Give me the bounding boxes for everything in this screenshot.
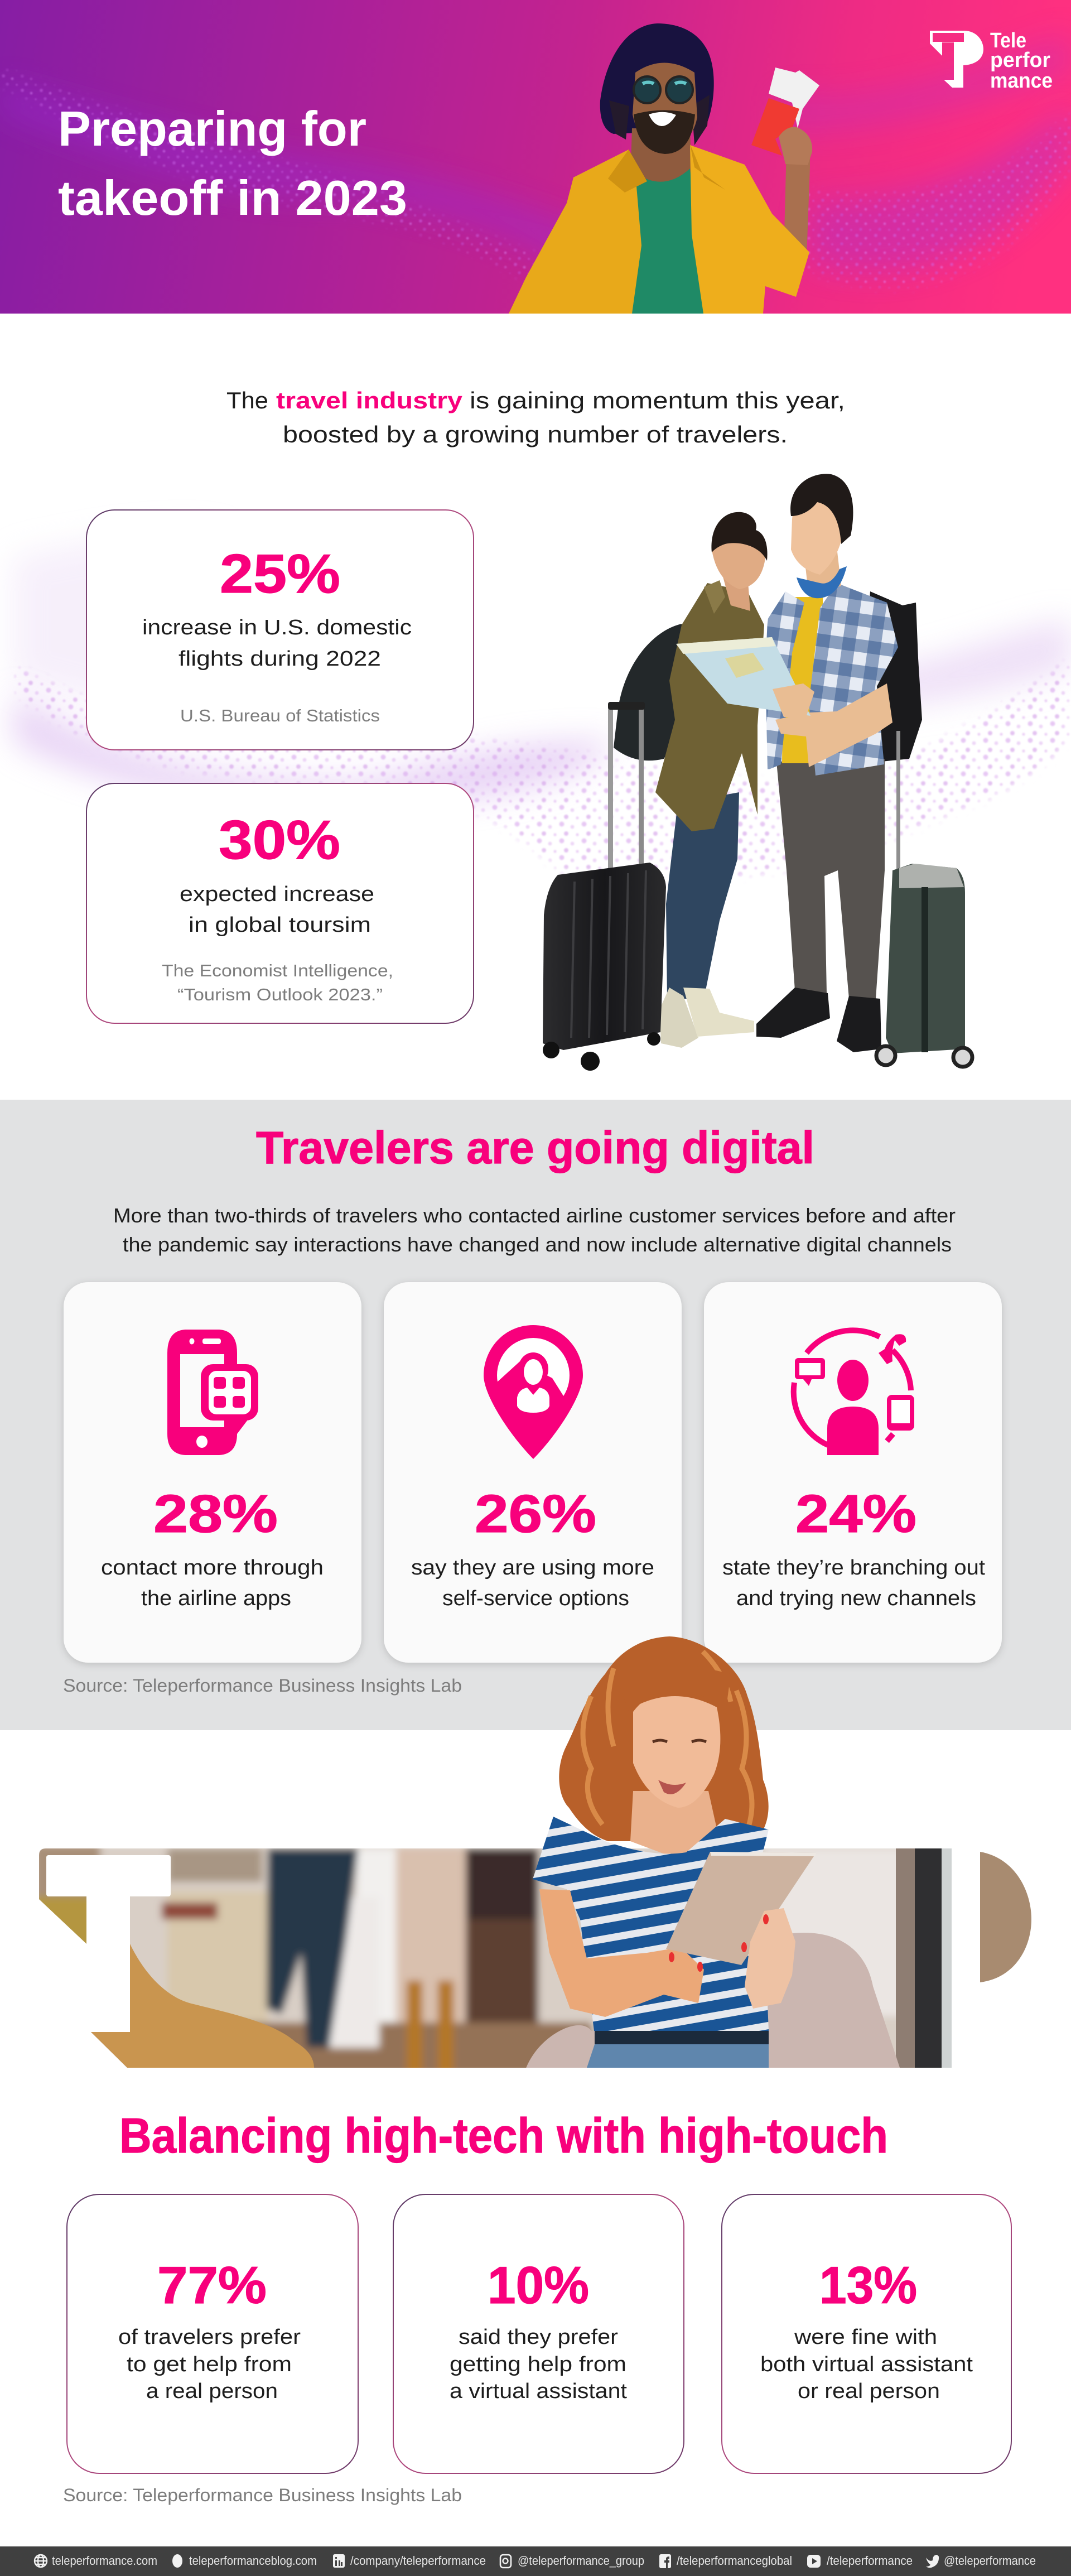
card: 24% new channels: and trying new channels xyxy=(736,1587,976,1610)
paragraph xyxy=(113,1204,956,1256)
intro statement xyxy=(226,387,845,447)
card: 13% xyxy=(722,2194,1011,2473)
man's hand on map xyxy=(773,683,814,717)
woman's backpack xyxy=(614,624,685,760)
stat card: 25%: increase in U.S. domestic xyxy=(142,616,412,639)
card: 24% new channels xyxy=(704,1282,1002,1663)
Teleperformance logo xyxy=(930,29,1053,93)
stat card: 30%: expected increase xyxy=(180,883,374,906)
P bowl wood segment xyxy=(980,1852,1031,1982)
banner background xyxy=(0,0,1071,314)
woman's jeans xyxy=(666,792,739,999)
source note: Source: Teleperformance Business Insights Lab xyxy=(63,1675,462,1696)
window frame xyxy=(896,1848,953,2072)
black suitcase xyxy=(543,702,666,1071)
mouth xyxy=(658,1780,686,1794)
Teleperformance logo: perfor xyxy=(990,49,1050,72)
card: 77% xyxy=(67,2194,358,2473)
man's backpack xyxy=(865,591,922,762)
section: travelers are going digital xyxy=(0,1100,1071,1730)
red nails xyxy=(669,1914,769,1972)
arm xyxy=(539,1889,704,2017)
tickets xyxy=(751,68,819,156)
card: 13%: both virtual assistant xyxy=(760,2353,973,2376)
stat card: 30%: “Tourism Outlook 2023.” xyxy=(177,985,383,1004)
source note: Source: Teleperformance Business Insights Lab xyxy=(63,2485,462,2505)
intro statement: is gaining momentum this year, xyxy=(470,387,845,413)
Teleperformance logo: mance xyxy=(990,69,1053,93)
hair curls xyxy=(583,1651,752,1830)
neck xyxy=(630,1791,720,1858)
title xyxy=(58,101,407,225)
green t-shirt xyxy=(632,168,706,314)
beige sofa xyxy=(524,1933,901,2073)
lilac particle swoosh background xyxy=(14,491,1071,915)
Facebook link: /teleperformanceglobal xyxy=(677,2554,792,2568)
yellow jacket xyxy=(509,150,641,314)
card: 24% new channels: 24% xyxy=(795,1484,916,1544)
card: 26% self-service xyxy=(384,1282,682,1663)
card: 77%: 77% xyxy=(157,2256,267,2314)
stat card: 30%: in global toursim xyxy=(189,913,371,937)
card: 24% new channels: state they’re branching out xyxy=(722,1556,985,1580)
LinkedIn link: /company/teleperformance xyxy=(350,2554,486,2568)
card: 10%: a virtual assistant xyxy=(450,2380,627,2403)
paragraph: the pandemic say interactions have changed and now include alternative digital channels xyxy=(123,1233,952,1256)
woman's head xyxy=(712,530,765,589)
woman with tablet xyxy=(533,1636,816,2068)
face xyxy=(633,1696,720,1808)
heading: Balancing high-tech with high-touch xyxy=(119,2108,888,2163)
card: 13%: 13% xyxy=(819,2256,917,2314)
man's trousers xyxy=(776,759,885,999)
woman's jacket xyxy=(655,583,764,831)
man's neck xyxy=(803,547,841,597)
intro section xyxy=(14,387,1071,1071)
card: 10%: getting help from xyxy=(450,2353,626,2376)
tablet xyxy=(666,1852,816,1965)
title: Preparing for xyxy=(58,101,366,156)
man's hair xyxy=(790,474,853,544)
neck xyxy=(630,128,692,192)
header banner xyxy=(0,0,1071,314)
man's shoes xyxy=(756,988,830,1038)
intro statement: The xyxy=(226,387,268,413)
face xyxy=(633,62,697,150)
stat card: 30%: 30% xyxy=(219,809,340,870)
paragraph: More than two-thirds of travelers who contacted airline customer services before and after xyxy=(113,1204,956,1227)
sunglasses xyxy=(634,76,693,103)
right hand xyxy=(745,1908,795,2009)
icon: phone with app tile xyxy=(167,1330,258,1455)
heading: Travelers are going digital xyxy=(256,1123,814,1173)
travelling couple with suitcases xyxy=(543,474,972,1071)
green suitcase xyxy=(876,731,972,1067)
blog link: teleperformanceblog.com xyxy=(189,2554,317,2568)
jeans xyxy=(587,2044,769,2068)
card: 13%: were fine with xyxy=(794,2325,937,2349)
card: 28% airline apps: contact more through xyxy=(101,1556,324,1580)
website link: teleperformance.com xyxy=(52,2554,157,2568)
card: 26% self-service: self-service options xyxy=(442,1587,629,1610)
card: 77%: of travelers prefer xyxy=(118,2325,301,2349)
stat card: 25% xyxy=(86,510,474,750)
footer bar xyxy=(0,2546,1071,2576)
woman's hair xyxy=(712,512,768,561)
stat card: 30%: The Economist Intelligence, xyxy=(162,961,393,980)
card: 77%: to get help from xyxy=(127,2353,292,2376)
section: balancing high-tech with high-touch xyxy=(63,2108,1011,2505)
Teleperformance logo: Tele xyxy=(990,29,1026,52)
man's forearm xyxy=(775,683,893,767)
card: 10% xyxy=(393,2194,684,2473)
man's plaid shirt xyxy=(765,591,804,770)
card: 28% airline apps: the airline apps xyxy=(141,1587,291,1610)
smile xyxy=(649,112,676,126)
card: 26% self-service: say they are using more xyxy=(411,1556,654,1580)
raised arm xyxy=(784,144,810,257)
grey panel xyxy=(0,1100,1071,1730)
intro statement: boosted by a growing number of travelers. xyxy=(283,421,788,447)
card: 10%: 10% xyxy=(488,2256,589,2314)
headphones xyxy=(797,566,847,598)
blurred cafe background xyxy=(33,1844,959,2076)
card: 26% self-service: 26% xyxy=(475,1484,596,1544)
photo band: T-P shaped image with woman and tablet xyxy=(33,1844,1031,2076)
hand xyxy=(779,127,812,165)
YouTube link: /teleperformance xyxy=(827,2554,913,2568)
card: 77%: a real person xyxy=(146,2380,278,2403)
man with yellow jacket holding tickets xyxy=(509,23,819,314)
hair back xyxy=(559,1636,769,1841)
stat card: 25%: U.S. Bureau of Statistics xyxy=(180,706,380,725)
beard xyxy=(634,110,695,154)
striped shirt xyxy=(533,1817,769,2031)
Twitter link: @teleperformance xyxy=(944,2554,1036,2568)
card: 10%: said they prefer xyxy=(459,2325,618,2349)
mustard armchair xyxy=(91,1944,314,2068)
icon: person with channels xyxy=(794,1330,914,1455)
stat card: 25%: flights during 2022 xyxy=(178,647,381,671)
particle swoosh xyxy=(1,23,1071,293)
belt xyxy=(595,2031,769,2044)
card: 28% airline apps: 28% xyxy=(153,1484,278,1544)
card: 13%: or real person xyxy=(798,2380,940,2403)
man's head xyxy=(791,488,843,575)
title: takeoff in 2023 xyxy=(58,170,407,225)
hair and hat xyxy=(600,23,714,134)
icon: location pin with person xyxy=(484,1325,583,1459)
intro statement: travel industry xyxy=(276,387,463,413)
eyes xyxy=(653,1740,706,1742)
fringe curls xyxy=(619,1660,731,1716)
map xyxy=(676,637,811,716)
woman's shoes xyxy=(659,988,698,1048)
white T cut-out xyxy=(46,1855,171,1896)
stat card: 25%: 25% xyxy=(220,543,340,604)
woman's neck xyxy=(722,575,750,611)
man's yellow t-shirt xyxy=(782,597,823,763)
stat card: 30% xyxy=(86,783,474,1023)
Instagram link: @teleperformance_group xyxy=(518,2554,644,2568)
card: 28% airline apps xyxy=(64,1282,361,1663)
